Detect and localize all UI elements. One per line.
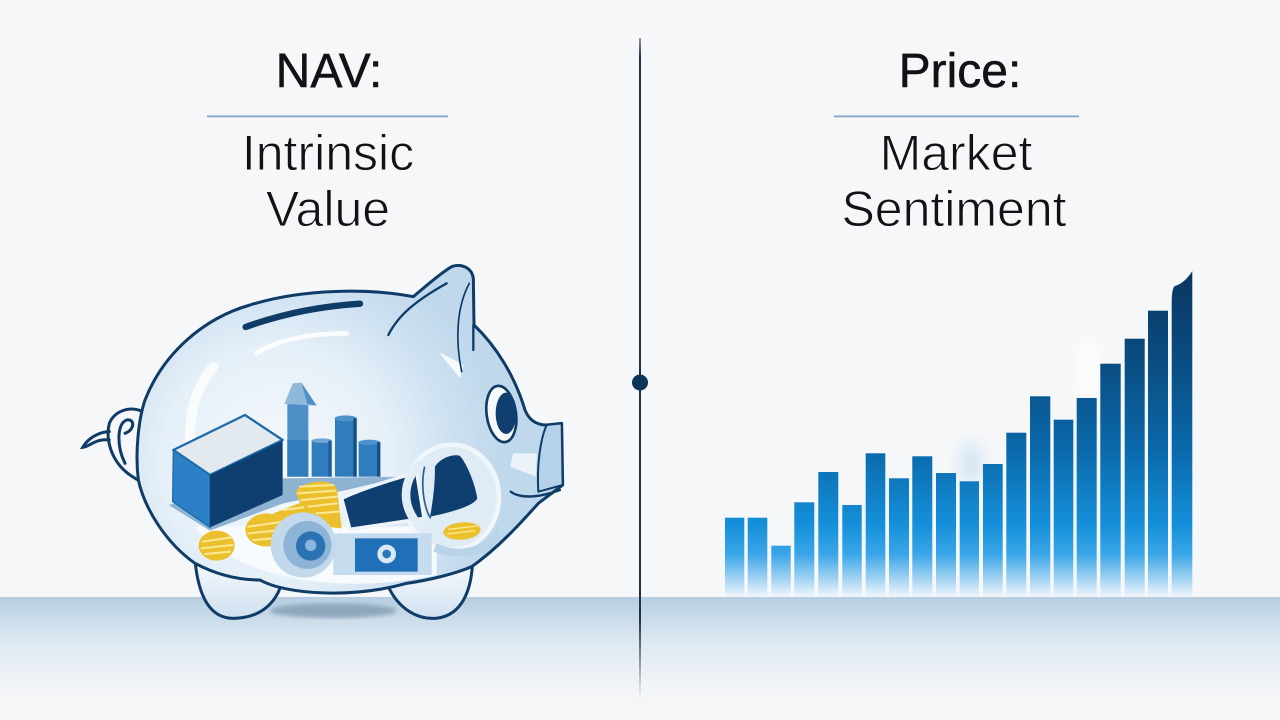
rising price bar chart xyxy=(725,271,1192,597)
gold coins xyxy=(199,482,342,561)
dark device xyxy=(342,473,424,529)
left heading: NAV: Intrinsic xyxy=(242,125,414,181)
magnifier lip and coin xyxy=(406,463,481,541)
piggy bank illustration xyxy=(83,265,563,618)
right heading: Price: Market xyxy=(880,125,1033,181)
pig eye xyxy=(483,384,520,444)
pig tail xyxy=(83,409,141,479)
soft glow behind bars xyxy=(962,345,1098,483)
belly highlight xyxy=(197,527,437,584)
left heading: NAV: Value xyxy=(266,181,390,237)
vertical divider xyxy=(632,38,648,698)
right heading: Price: Sentiment xyxy=(841,181,1067,237)
right heading: Price: Price: xyxy=(899,45,1021,98)
left heading: NAV: NAV: xyxy=(276,45,382,98)
left heading: NAV xyxy=(207,45,448,237)
base shadow under assets xyxy=(169,477,403,531)
magnifier ring xyxy=(404,445,500,556)
floor band xyxy=(0,597,1280,720)
floor shadow xyxy=(270,603,397,618)
pig snout xyxy=(511,423,563,496)
property box xyxy=(173,415,283,527)
right heading: Price xyxy=(834,45,1079,237)
divider dot xyxy=(632,374,648,390)
glass highlights xyxy=(190,333,537,530)
pig body xyxy=(137,265,563,593)
pig ear xyxy=(388,283,473,372)
pig legs xyxy=(195,560,472,618)
asset columns with arrow xyxy=(284,383,380,477)
mechanical block xyxy=(333,533,432,575)
coin slot xyxy=(246,304,360,327)
gear wheel xyxy=(271,512,336,578)
